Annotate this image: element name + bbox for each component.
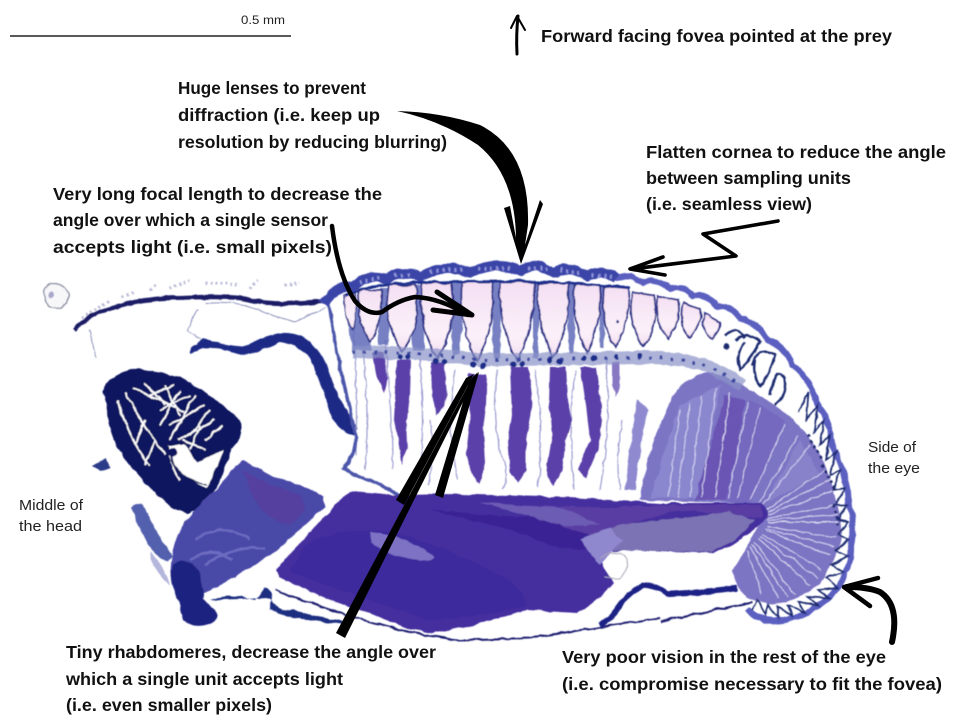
- text block: tiny rhabdomeres: which a single unit accepts light: [65, 669, 343, 689]
- specimen: upper head cuticle line: [75, 280, 327, 358]
- specimen: dark blue tissue band: [190, 333, 358, 436]
- text block: tiny rhabdomeres: Tiny rhabdomeres, decrease the angle over: [66, 642, 436, 662]
- text block: flatten cornea: (i.e. seamless view): [646, 194, 812, 214]
- text block: huge lenses: resolution by reducing blurring): [178, 132, 447, 152]
- text block: long focal length: angle over which a single sensor: [53, 210, 328, 230]
- specimen: horizontal receptor band: [352, 352, 742, 385]
- text block: long focal length: Very long focal length to decrease the: [53, 184, 382, 204]
- text block: poor vision: [562, 647, 942, 694]
- specimen: lower cuticle lines: [275, 552, 752, 640]
- text block: tiny rhabdomeres: [65, 642, 436, 715]
- heading: forward facing fovea: Forward facing fovea pointed at the prey: [541, 26, 892, 46]
- specimen: lens row: [344, 282, 720, 361]
- specimen: rhabdomere strands: [372, 352, 648, 490]
- arrow: tiny rhabdomeres long arrow: [336, 372, 479, 638]
- specimen: dark tissue knot at lower left: [171, 561, 345, 626]
- label: side of the eye: [868, 440, 920, 477]
- specimen: main retina interior fibres: [352, 310, 622, 490]
- label: middle of the head: Middle of: [19, 498, 84, 514]
- text block: huge lenses: diffraction (i.e. keep up: [178, 105, 380, 125]
- text block: long focal length: accepts light (i.e. small pixels): [53, 237, 332, 257]
- text block: huge lenses: Huge lenses to prevent: [178, 78, 366, 98]
- text block: flatten cornea: between sampling units: [646, 168, 851, 188]
- specimen: jumping spider eye tube section: [44, 266, 853, 640]
- specimen: small round cell at upper left: [44, 283, 68, 307]
- specimen: blue stalks between lenses: [345, 282, 605, 358]
- arrow: long focal length: [332, 226, 472, 315]
- text block: poor vision: (i.e. compromise necessary to fit the fovea): [562, 674, 942, 694]
- label: middle of the head: the head: [19, 519, 82, 535]
- text block: long focal length: [53, 184, 382, 257]
- specimen: lower purple brain: [276, 492, 768, 633]
- text block: flatten cornea: [646, 142, 946, 214]
- specimen: scattered fragments at left: [92, 458, 172, 586]
- specimen: curved outer cornea: [323, 266, 853, 621]
- label: middle of the head: [19, 498, 84, 535]
- arrow: flatten cornea zigzag: [630, 221, 778, 275]
- specimen: large purple fan of peripheral retina: [640, 373, 842, 603]
- specimen: left purple brain mass: [170, 460, 325, 598]
- text block: flatten cornea: Flatten cornea to reduce the angle: [646, 142, 946, 162]
- text block: poor vision: Very poor vision in the rest of the eye: [562, 647, 886, 667]
- arrow: forward facing fovea: [511, 16, 525, 54]
- specimen: black muscle block: [103, 368, 241, 513]
- label: side of the eye: Side of: [868, 440, 917, 456]
- label: side of the eye: the eye: [868, 461, 920, 477]
- specimen: left retina wall: [328, 302, 400, 496]
- text block: huge lenses: [178, 78, 447, 152]
- arrow: huge lenses: [397, 111, 543, 264]
- arrow: poor vision curved: [844, 578, 894, 642]
- specimen: peripheral lenses zigzag: [724, 331, 849, 618]
- text block: tiny rhabdomeres: (i.e. even smaller pixels): [66, 695, 272, 715]
- scale bar: 0.5 mm: [241, 13, 285, 27]
